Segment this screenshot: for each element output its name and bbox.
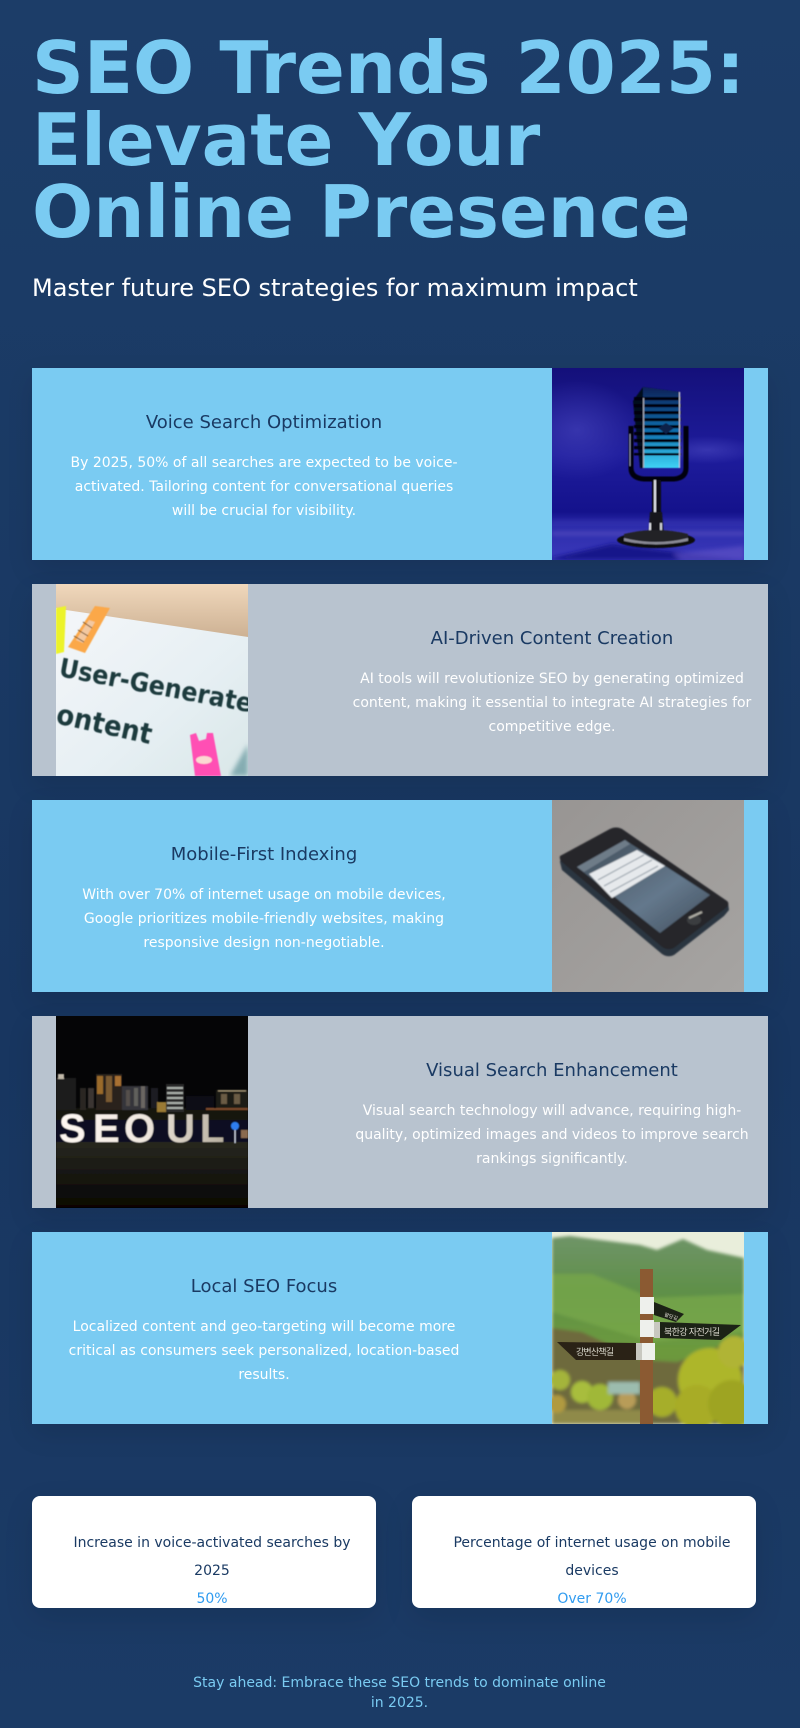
local SEO text: Local SEO Focus [191, 1276, 337, 1297]
voice search text: will be crucial for visibility. [172, 503, 356, 519]
stat card: mobile usage [412, 1496, 756, 1608]
visual search text: Visual search technology will advance, requiring high- [363, 1103, 741, 1119]
visual search text [355, 1060, 749, 1167]
mobile text: Mobile-First Indexing [171, 844, 357, 865]
stat value: 50% [196, 1591, 228, 1607]
stat value: Over 70% [557, 1591, 627, 1607]
panel: voice search optimization [32, 368, 768, 560]
image: signpost with mountains: 팔당길 [663, 1311, 679, 1322]
visual search text: rankings significantly. [476, 1151, 628, 1167]
voice search text [70, 412, 458, 519]
footer: in 2025. [371, 1695, 428, 1711]
AI content text: AI tools will revolutionize SEO by generating optimized [360, 671, 744, 687]
title: Online Presence [32, 170, 691, 254]
local SEO text: results. [238, 1367, 290, 1383]
local SEO text [69, 1276, 459, 1383]
title: SEO Trends 2025: [32, 26, 745, 110]
footer: Stay ahead: Embrace these SEO trends to dominate online [193, 1675, 606, 1691]
stat label: 2025 [194, 1563, 230, 1579]
local SEO text: critical as consumers seek personalized, location-based [69, 1343, 459, 1359]
visual search text: quality, optimized images and videos to improve search [355, 1127, 749, 1143]
image: user-generated content paper [56, 584, 248, 776]
image: studio microphone [552, 368, 744, 560]
panel: visual search enhancement [32, 1016, 768, 1208]
voice search text: By 2025, 50% of all searches are expected to be voice- [70, 455, 458, 471]
mobile text [82, 844, 446, 951]
visual search text: Visual Search Enhancement [426, 1060, 678, 1081]
panel: AI-driven content creation [32, 584, 768, 776]
voice search text: Voice Search Optimization [146, 412, 382, 433]
AI content text: AI-Driven Content Creation [431, 628, 673, 649]
stat label [73, 1535, 350, 1579]
AI content text [353, 628, 752, 735]
voice search text: activated. Tailoring content for conversational queries [75, 479, 453, 495]
subtitle: Master future SEO strategies for maximum impact [32, 274, 638, 302]
local SEO text: Localized content and geo-targeting will become more [73, 1319, 455, 1335]
image: signpost with mountains: 북한강 자전거길 [664, 1327, 720, 1337]
panel: mobile-first indexing [32, 800, 768, 992]
image: Seoul sign at night [56, 1016, 248, 1208]
image: user-generated content paper: ontent [56, 698, 155, 751]
mobile text: Google prioritizes mobile-friendly websites, making [84, 911, 444, 927]
AI content text: competitive edge. [489, 719, 615, 735]
image: smartphone on grey surface [552, 800, 744, 992]
stat card: voice searches [32, 1496, 376, 1608]
panel: local SEO focus [32, 1232, 768, 1424]
stat label: Percentage of internet usage on mobile [453, 1535, 731, 1551]
stat label: Increase in voice-activated searches by [73, 1535, 350, 1551]
stat label: devices [565, 1563, 619, 1579]
title [32, 26, 745, 254]
title: Elevate Your [32, 98, 540, 182]
image: signpost with mountains: 강변산책길 [576, 1346, 614, 1357]
mobile text: responsive design non-negotiable. [143, 935, 385, 951]
mobile text: With over 70% of internet usage on mobile devices, [82, 887, 446, 903]
image: Seoul sign at night: SEOUL [59, 1107, 224, 1151]
image: signpost with mountains [552, 1232, 744, 1424]
footer [193, 1675, 606, 1711]
stat label [453, 1535, 731, 1579]
AI content text: content, making it essential to integrate AI strategies for [353, 695, 751, 711]
